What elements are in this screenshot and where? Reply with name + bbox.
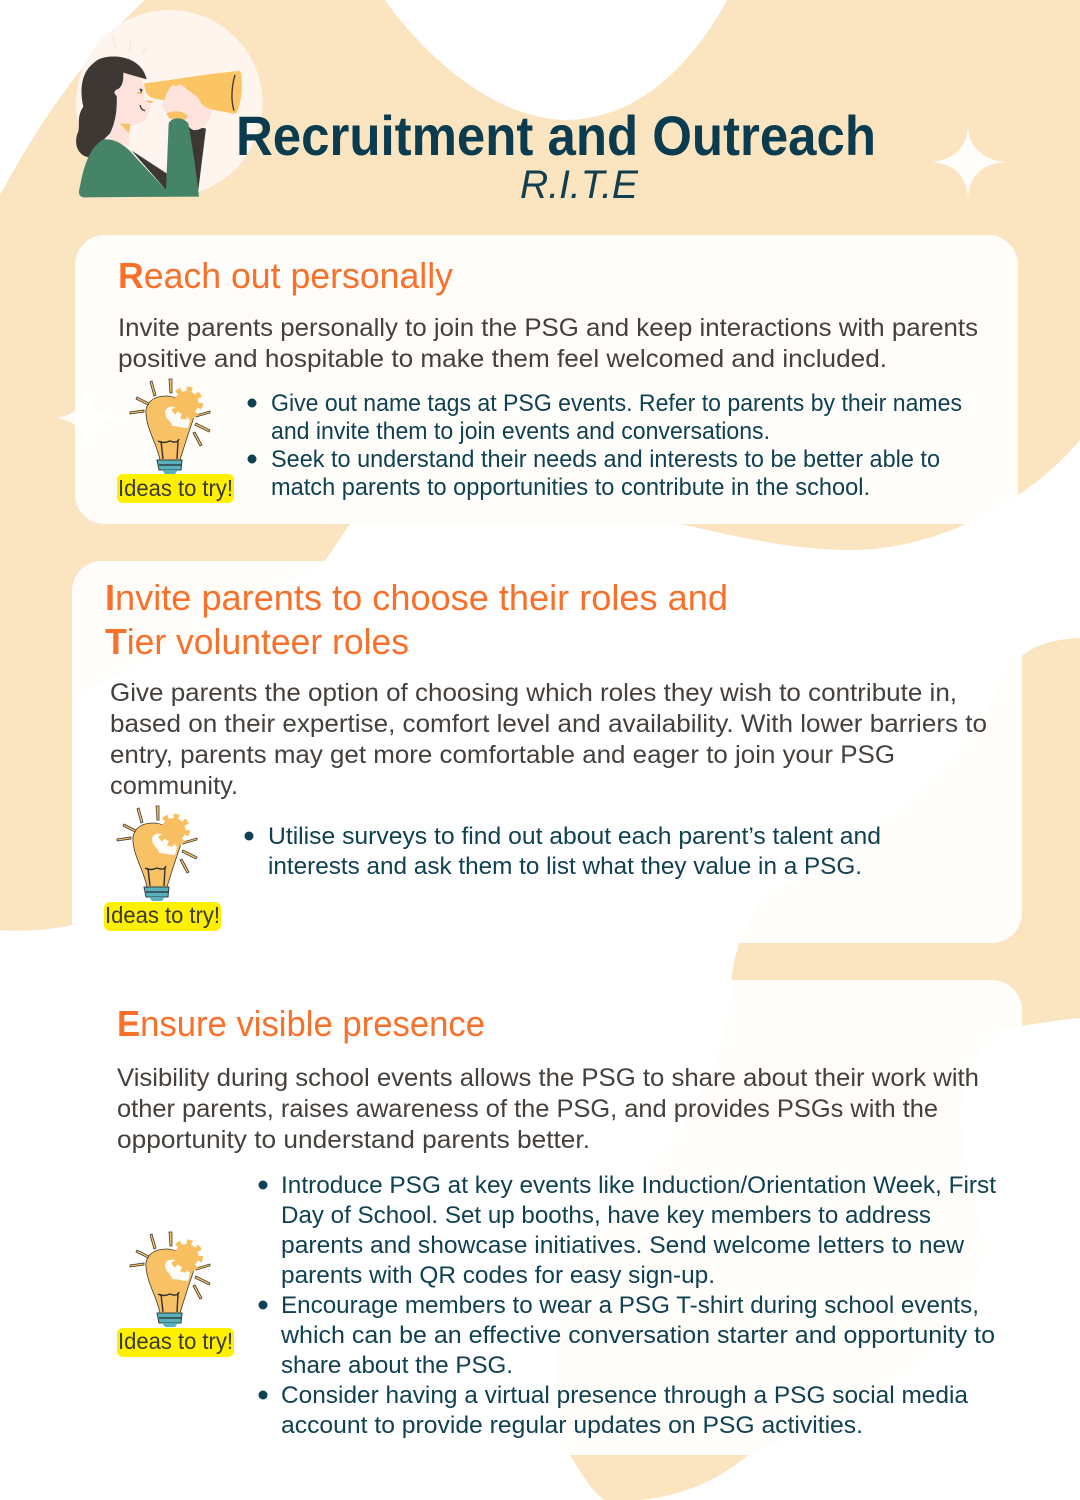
heading: Ensure visible presence <box>117 1003 485 1044</box>
text block: positive and hospitable to make them feel welcomed and included. <box>118 345 887 373</box>
text block: Visibility during school events allows the PSG to share about their work with <box>117 1064 979 1092</box>
bullet list: and invite them to join events and conversations. <box>271 418 770 445</box>
panel: Invite parents and Tier roles <box>72 561 1022 943</box>
panel: Ensure visible presence <box>72 980 1022 1455</box>
bullet list: interests and ask them to list what they value in a PSG. <box>268 853 862 880</box>
heading: Reach out personally <box>118 255 453 296</box>
bullet list: Consider having a virtual presence through a PSG social media <box>281 1382 969 1409</box>
bullet list: account to provide regular updates on PSG activities. <box>281 1412 863 1439</box>
bullet list: Day of School. Set up booths, have key members to address <box>281 1202 931 1229</box>
text block: Invite parents personally to join the PSG and keep interactions with parents <box>118 314 978 342</box>
heading: Invite parents to choose their roles and <box>105 577 728 618</box>
icon: light bulb with ideas tag <box>104 806 221 931</box>
decorative sparkle right <box>932 126 1005 198</box>
text block: community. <box>110 772 238 800</box>
panel: Reach out personally <box>75 235 1018 524</box>
bullet list: parents with QR codes for easy sign-up. <box>281 1262 715 1289</box>
icon: light bulb with ideas tag: Ideas to try! <box>118 475 233 501</box>
text block: entry, parents may get more comfortable and eager to join your PSG <box>110 741 895 769</box>
icon: light bulb with ideas tag: Ideas to try! <box>118 1328 233 1354</box>
title line: Recruitment and Outreach <box>236 104 876 167</box>
bullet list: share about the PSG. <box>281 1352 513 1379</box>
bullet list: parents and showcase initiatives. Send welcome letters to new <box>281 1232 965 1259</box>
panel background <box>72 561 1022 943</box>
panel background <box>75 235 1018 524</box>
bullet list: Seek to understand their needs and interests to be better able to <box>271 446 940 473</box>
text block: based on their expertise, comfort level and availability. With lower barriers to <box>110 710 987 738</box>
heading: Tier volunteer roles <box>105 621 409 662</box>
decorative sparkle left <box>56 386 118 452</box>
bullet list: Utilise surveys to find out about each parent’s talent and <box>268 823 881 850</box>
text block <box>118 314 978 373</box>
icon: light bulb with ideas tag <box>117 1232 234 1357</box>
text block <box>117 1064 979 1154</box>
text block <box>110 679 987 800</box>
bullet list: Give out name tags at PSG events. Refer to parents by their names <box>271 390 962 417</box>
text block: other parents, raises awareness of the PSG, and provides PSGs with the <box>117 1095 938 1123</box>
bullet list <box>244 823 881 880</box>
panel background <box>72 980 1022 1455</box>
bullet list: match parents to opportunities to contribute in the school. <box>271 474 870 501</box>
bullet list: which can be an effective conversation starter and opportunity to <box>280 1322 995 1349</box>
bullet list <box>258 1172 996 1439</box>
illustration: woman with megaphone <box>76 10 263 197</box>
bullet list <box>248 390 962 501</box>
heading <box>105 577 728 662</box>
title <box>236 104 876 207</box>
text block: Give parents the option of choosing which roles they wish to contribute in, <box>110 679 957 707</box>
text block: opportunity to understand parents better. <box>117 1126 590 1154</box>
icon: light bulb with ideas tag: Ideas to try! <box>105 902 220 928</box>
subtitle: R.I.T.E <box>520 163 639 207</box>
bullet list: Introduce PSG at key events like Induction/Orientation Week, First <box>281 1172 996 1199</box>
icon: light bulb with ideas tag <box>117 379 234 503</box>
bullet list: Encourage members to wear a PSG T-shirt during school events, <box>281 1292 979 1319</box>
